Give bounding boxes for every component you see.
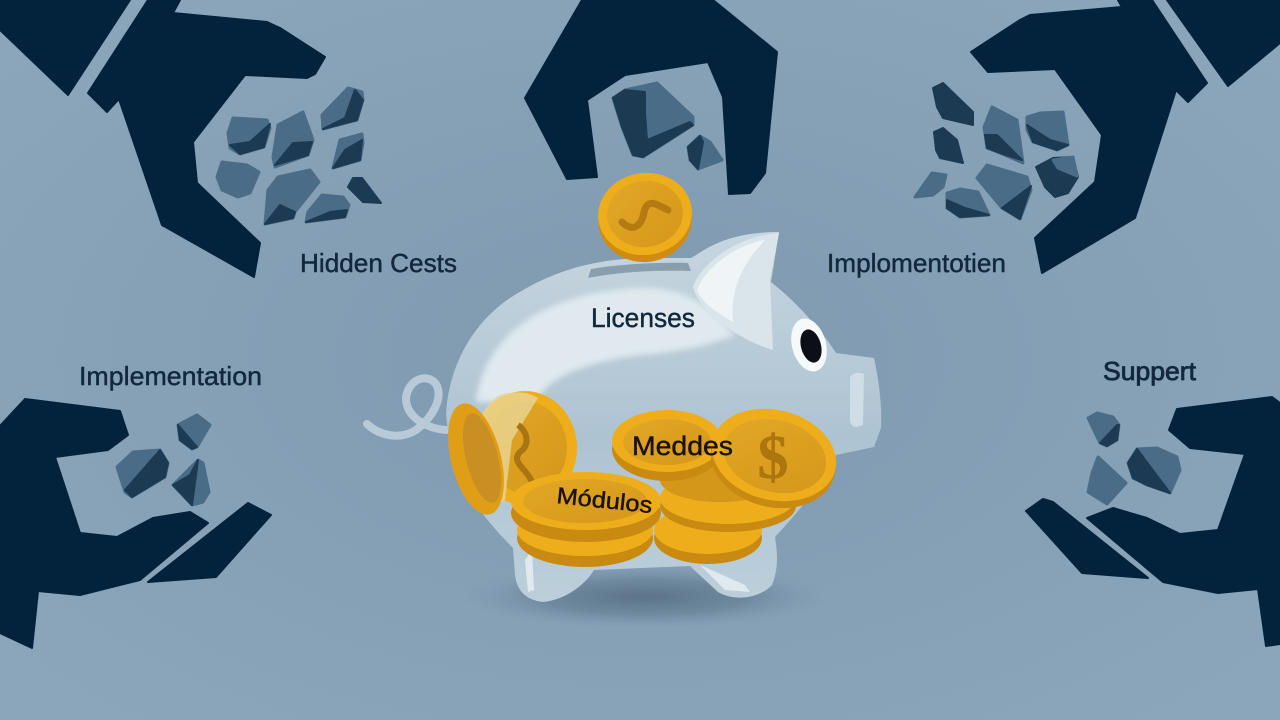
label: Licenses: Licenses xyxy=(591,303,695,333)
rocks: bottom right xyxy=(1088,413,1180,504)
label: Suppert: Suppert xyxy=(1103,356,1197,386)
pig body xyxy=(446,232,881,602)
hand: top centre xyxy=(525,0,777,194)
hand: bottom left xyxy=(0,399,271,648)
label: Implementation: Implementation xyxy=(79,361,262,391)
rocks: top right xyxy=(915,83,1078,219)
falling coin xyxy=(592,167,698,268)
coin stack: left tilted coins xyxy=(438,391,577,520)
coin label: Meddes: Meddes xyxy=(632,431,733,461)
coin stack: right back coins xyxy=(612,410,796,564)
piggy bank xyxy=(367,232,881,602)
label: Hidden Cests: Hidden Cests xyxy=(300,248,457,278)
coin: front right with dollar sign: $ xyxy=(758,424,788,492)
rocks: top left xyxy=(217,88,381,224)
hand: bottom right xyxy=(1026,397,1280,646)
pig snout highlight xyxy=(850,373,864,427)
leg highlights xyxy=(525,550,750,592)
pig eye xyxy=(786,315,832,375)
coin slot xyxy=(588,263,691,278)
rocks: top centre xyxy=(613,83,722,169)
pig tail xyxy=(367,378,446,436)
pig highlight band xyxy=(476,288,735,402)
label: Implomentotien: Implomentotien xyxy=(827,248,1006,278)
pig ear xyxy=(693,233,779,350)
hand: top right xyxy=(971,0,1280,273)
ground shadow xyxy=(460,565,830,629)
rocks: bottom left xyxy=(117,415,210,505)
coin: front right with dollar sign xyxy=(701,396,846,521)
coin label: Modulos: Módulos xyxy=(555,482,654,518)
hand: top left xyxy=(0,0,325,277)
coin stack: front coins xyxy=(511,472,661,567)
